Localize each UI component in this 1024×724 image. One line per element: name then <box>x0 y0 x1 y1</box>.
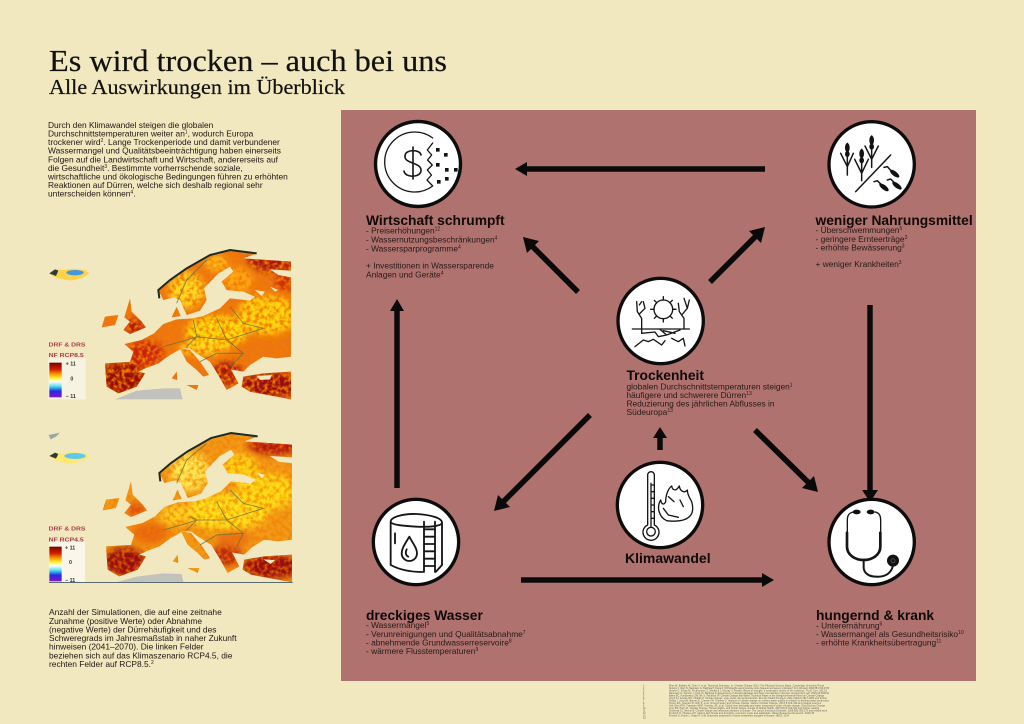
text: Nahrungsmittel: - Überschwemmungen <box>816 225 899 235</box>
footnotes: Kreibich H, Thieken AH. Coping with floods and droughts: economic costs and adaptation. Water Resources Research. 2009;45 <box>669 712 815 715</box>
text: Wasser <box>366 620 526 656</box>
intro text block: wirtschaftliche und ökologische Bedingungen führen zu erhöhten <box>47 171 288 181</box>
text: Trockenheit: Südeuropa <box>626 407 667 417</box>
footnotes: Taylor RG, Scanlon B, Döll P, et al. Ground water and climate change. Nature Climate Change. 2013;3:322-329 and related sources <box>669 702 822 705</box>
map caption text: beziehen sich auf das Klimaszenario RCP4.5, die <box>49 650 233 660</box>
footnote numbers <box>643 686 646 720</box>
text: krank: - erhöhte Krankheitsübertragung <box>816 638 936 648</box>
legend max: + 11 <box>65 545 75 551</box>
footnote numbers: 3 <box>643 690 645 692</box>
text: krank <box>816 620 964 648</box>
footnote numbers: 11 <box>643 710 646 712</box>
footnote numbers: 4 <box>643 693 645 695</box>
footnote numbers: 8 <box>643 703 645 705</box>
icon: Nahrungsmittel <box>829 122 914 207</box>
text: Trockenheit: 1 <box>790 382 793 388</box>
map caption text <box>49 607 237 669</box>
footnote numbers: 6 <box>643 698 645 700</box>
footnotes: Allen M, Babiker M, Chen Y, et al. Technical Summary. In: Climate Change 2013: The Physical Science Basis. Cambridge University Press <box>669 684 825 688</box>
text: Trockenheit: 13 <box>746 391 752 397</box>
legend zero: 0 <box>70 376 73 382</box>
text: Nahrungsmittel: 3 <box>902 244 905 250</box>
arrow: Trockenheit to krank <box>755 430 818 492</box>
footnote numbers: 13 <box>643 716 646 718</box>
text: Wasser: - Wassermängel <box>366 620 426 630</box>
text: Trockenheit <box>626 382 793 417</box>
map caption text: 2 <box>151 660 154 666</box>
icon: krank <box>829 499 914 585</box>
text: Wirtschaft <box>366 226 498 280</box>
text: Wasser: - abnehmende Grundwasserreservoire <box>366 638 509 648</box>
text: Trockenheit: häufigere und schwerere Dürren <box>626 390 746 400</box>
legend max: + 11 <box>66 361 76 367</box>
map legend box <box>49 542 85 582</box>
map borders <box>163 443 263 547</box>
text: Wirtschaft: 12 <box>435 226 440 232</box>
footnotes: Semenza JC, Menne B. Climate change and infectious diseases in Europe. The Lancet Infectious Diseases. 2009;9(6):365-375 and related work <box>669 710 828 712</box>
text: Wirtschaft: + Investitionen in Wassersparende <box>366 260 494 270</box>
text: Nahrungsmittel: 3 <box>899 260 902 266</box>
footnote numbers: 9 <box>643 706 645 708</box>
legend colour bar <box>49 363 62 397</box>
arrow: Nahrungsmittel to krank <box>862 305 878 502</box>
text: krank: 10 <box>958 630 964 636</box>
intro text block: . Bestimmte vorherrschende soziale, <box>107 163 243 173</box>
panel: wirkungsgefüge <box>341 110 976 681</box>
footnote numbers: 10 <box>643 708 646 710</box>
intro text block: 1 <box>185 130 188 136</box>
map speckle texture <box>102 252 291 400</box>
icon: Wasser <box>373 499 459 585</box>
heading: hungernd & krank: hungernd & krank <box>816 608 934 623</box>
text: krank: 11 <box>936 638 942 644</box>
text: Wasser: 9 <box>475 647 478 653</box>
text: Wirtschaft: 4 <box>441 270 444 276</box>
text: Wirtschaft: - Wassernutzungsbeschränkungen <box>366 235 495 245</box>
Iceland cold core <box>64 453 86 459</box>
footnotes: Naumann G, Spinoni J, Vogt JV, Barbosa P. Assessment of drought damages and their uncertainties in Europe. Environ Res Lett. 2018;13:094012 <box>669 692 830 695</box>
text: Wasser: - wärmere Flusstemperaturen <box>366 646 475 656</box>
intro text block: . Lange Trockenperiode und damit verbundener <box>103 137 280 147</box>
legend title 1: DRF & DRS <box>49 527 86 533</box>
footnote numbers: 1 <box>643 686 645 688</box>
intro text block: Durchschnittstemperaturen weiter an <box>48 129 185 139</box>
text: Wirtschaft: 4 <box>495 236 498 242</box>
intro text block: die Gesundheit <box>48 163 104 173</box>
map: Europa RCP8.5 <box>48 247 300 403</box>
footnote numbers: 14 <box>643 718 646 720</box>
map caption text: Zunahme (positive Werte) oder Abnahme <box>49 616 202 626</box>
text: Wirtschaft: 4 <box>458 244 461 250</box>
footnote numbers: 7 <box>643 700 645 702</box>
arrow: Klimawandel to Trockenheit <box>653 427 667 450</box>
intro text block: Wassermangel und Qualitätsbeeinträchtigung haben einerseits <box>48 146 281 156</box>
legend zero: 0 <box>69 560 72 566</box>
intro text block: 4 <box>130 190 133 196</box>
footnotes: Delpla I, Jung AV, Baures E, Clement M, Thomas O. Impacts of climate change on surface water quality in relation to drinking water production <box>669 700 830 702</box>
text: Nahrungsmittel: + weniger Krankheiten <box>816 259 899 269</box>
Iceland dark west <box>49 453 58 459</box>
arrow: Trockenheit to Nahrungsmittel <box>710 227 765 282</box>
intro text block: trockener wird <box>48 137 101 147</box>
heading: Trockenheit: Trockenheit <box>626 368 704 383</box>
map caption text: Anzahl der Simulationen, die auf eine zeitnahe <box>49 607 222 617</box>
text: Wirtschaft: Anlagen und Geräte <box>366 270 441 280</box>
intro text block: 3 <box>104 164 107 170</box>
map lakes and holes <box>257 456 292 564</box>
intro text block: . <box>133 188 136 198</box>
map coast dark edge <box>158 250 257 298</box>
map legend box <box>48 358 86 399</box>
text: Trockenheit: 13 <box>667 408 673 414</box>
map caption text: Schweregrads im Jahresmaßstab in naher Zukunft <box>49 633 237 643</box>
North Africa <box>117 573 183 582</box>
heading: Klimawandel: Klimawandel <box>625 550 711 566</box>
title: Es wird trocken – auch bei uns <box>49 44 447 78</box>
text: Wasser: - Verunreinigungen und Qualitätsabnahme <box>366 629 523 639</box>
footnotes: Forzieri G, Feyen L, Rojas R, et al. Ensemble projections of future streamflow droughts in Europe. HESS. 2014 <box>669 714 790 718</box>
text: krank: - Unterernährung <box>816 620 880 630</box>
intro text block: Durch den Klimawandel steigen die globalen <box>48 120 214 130</box>
heading: dreckiges Wasser: dreckiges Wasser <box>366 608 483 623</box>
intro text block <box>47 120 288 198</box>
arrow: Nahrungsmittel to Wirtschaft <box>515 162 765 176</box>
icon: Wirtschaft <box>376 122 460 206</box>
map base line <box>49 581 293 584</box>
arrow: Wasser to Wirtschaft <box>390 299 404 488</box>
footnote numbers: 5 <box>643 696 645 698</box>
map caption text: rechten Felder auf RCP8.5. <box>49 659 151 669</box>
text: Wasser: 7 <box>523 630 526 636</box>
footnotes: Stanke C, Kerac M, Prudhomme C, Medlock J, Murray V. Health effects of drought: a systematic review of the evidence. PLoS Curr. 2013;5 <box>669 690 828 692</box>
map lakes and holes <box>255 269 291 380</box>
intro text block: 2 <box>101 138 104 144</box>
text: Nahrungsmittel: - erhöhte Bewässerung <box>816 242 902 252</box>
footnotes: Bates BC, Kundzewicz ZW, Wu S, Palutikof JP. Climate Change and Water. Technical Paper of the Intergovernmental Panel on Climate Change <box>669 694 825 698</box>
intro text block: Folgen auf die Landwirtschaft und Wirtschaft, andererseits auf <box>48 154 279 164</box>
intro text block: Reaktionen auf Dürren, welche sich deshalb regional sehr <box>48 180 263 190</box>
map land colour field <box>102 251 291 400</box>
text: Nahrungsmittel: 3 <box>905 235 908 241</box>
text: Trockenheit: Reduzierung des jährlichen Abflusses in <box>626 398 775 408</box>
legend colour bar <box>49 547 62 581</box>
arrow: Trockenheit to Wasser <box>494 415 590 511</box>
text: Nahrungsmittel <box>816 225 908 269</box>
legend title 2: NF RCP4.5 <box>49 537 84 543</box>
map: Europa RCP4.5 <box>49 430 303 587</box>
text: Wasser: 5 <box>426 621 429 627</box>
footnote numbers: 2 <box>643 688 645 690</box>
text: krank: 6 <box>880 622 883 628</box>
map land colour field <box>102 434 292 582</box>
text: Trockenheit: globalen Durchschnittstemperaturen steigen <box>626 382 790 392</box>
text: Nahrungsmittel: 5 <box>899 226 902 232</box>
map coast dark edge <box>159 433 258 481</box>
map caption text: hinweisen (2041–2070). Die linken Felder <box>49 642 204 652</box>
text: Nahrungsmittel: - geringere Ernteerträge <box>816 234 905 244</box>
text: krank: - Wassermangel als Gesundheitsrisiko <box>816 629 958 639</box>
icon: Klimawandel <box>617 462 703 548</box>
footnotes: Spinoni J, Vogt JV, Naumann G, Barbosa P, Dosio A. Will drought events become more frequent and severe in Europe? Int J Climatol. 2018;38:1718-1736 <box>669 687 830 690</box>
Iceland cold core <box>66 270 84 275</box>
text: Wirtschaft: - Preiserhöhungen <box>366 226 435 236</box>
Iceland <box>49 269 89 281</box>
footnotes <box>669 684 830 718</box>
map borders <box>163 260 263 367</box>
Jan Mayen islet <box>49 433 60 439</box>
intro text block: unterscheiden können <box>48 188 130 198</box>
North Africa <box>115 388 183 399</box>
text: Wasser: 8 <box>509 638 512 644</box>
intro text block: , wodurch Europa <box>188 129 254 139</box>
legend title 1: DRF & DRS <box>49 343 86 349</box>
footnote numbers: 12 <box>643 713 646 715</box>
legend min: − 11 <box>65 578 75 584</box>
Iceland <box>49 452 90 464</box>
footnotes: Van Vliet MTH, Franssen WHP, Yearsley JR, et al. Global river discharge and water temperature under climate change. Glob Environ Change <box>669 704 826 708</box>
subtitle: Alle Auswirkungen im Überblick <box>49 75 346 99</box>
footnotes: Levy BS, Patz JA. Climate Change, Human Rights, and Social Justice. Annals of Global Health. 2015;81(3):310-322 and further reading <box>669 707 820 710</box>
arrow: Trockenheit to Wirtschaft <box>523 237 578 292</box>
legend title 2: NF RCP8.5 <box>49 353 84 359</box>
heading: Wirtschaft schrumpft: Wirtschaft schrumpft <box>366 213 505 228</box>
legend min: − 11 <box>66 394 76 400</box>
map caption text: (negative Werte) der Dürrehäufigkeit und des <box>49 624 216 634</box>
arrows <box>390 162 878 587</box>
arrow: Wasser to krank <box>521 573 774 587</box>
icon: Trockenheit <box>618 278 703 364</box>
footnotes: Lloyd SJ, Kovats RS, Chalabi Z. Climate change, crop yields, and undernutrition. Environ Health Perspect. 2011;119(12):1817-1823 and further <box>669 697 827 700</box>
Iceland dark west <box>49 269 58 276</box>
map speckle texture <box>102 434 292 582</box>
text: Wirtschaft: - Wassersparprogramme <box>366 244 458 254</box>
heading: weniger Nahrungsmittel: weniger Nahrungsmittel <box>814 213 973 228</box>
